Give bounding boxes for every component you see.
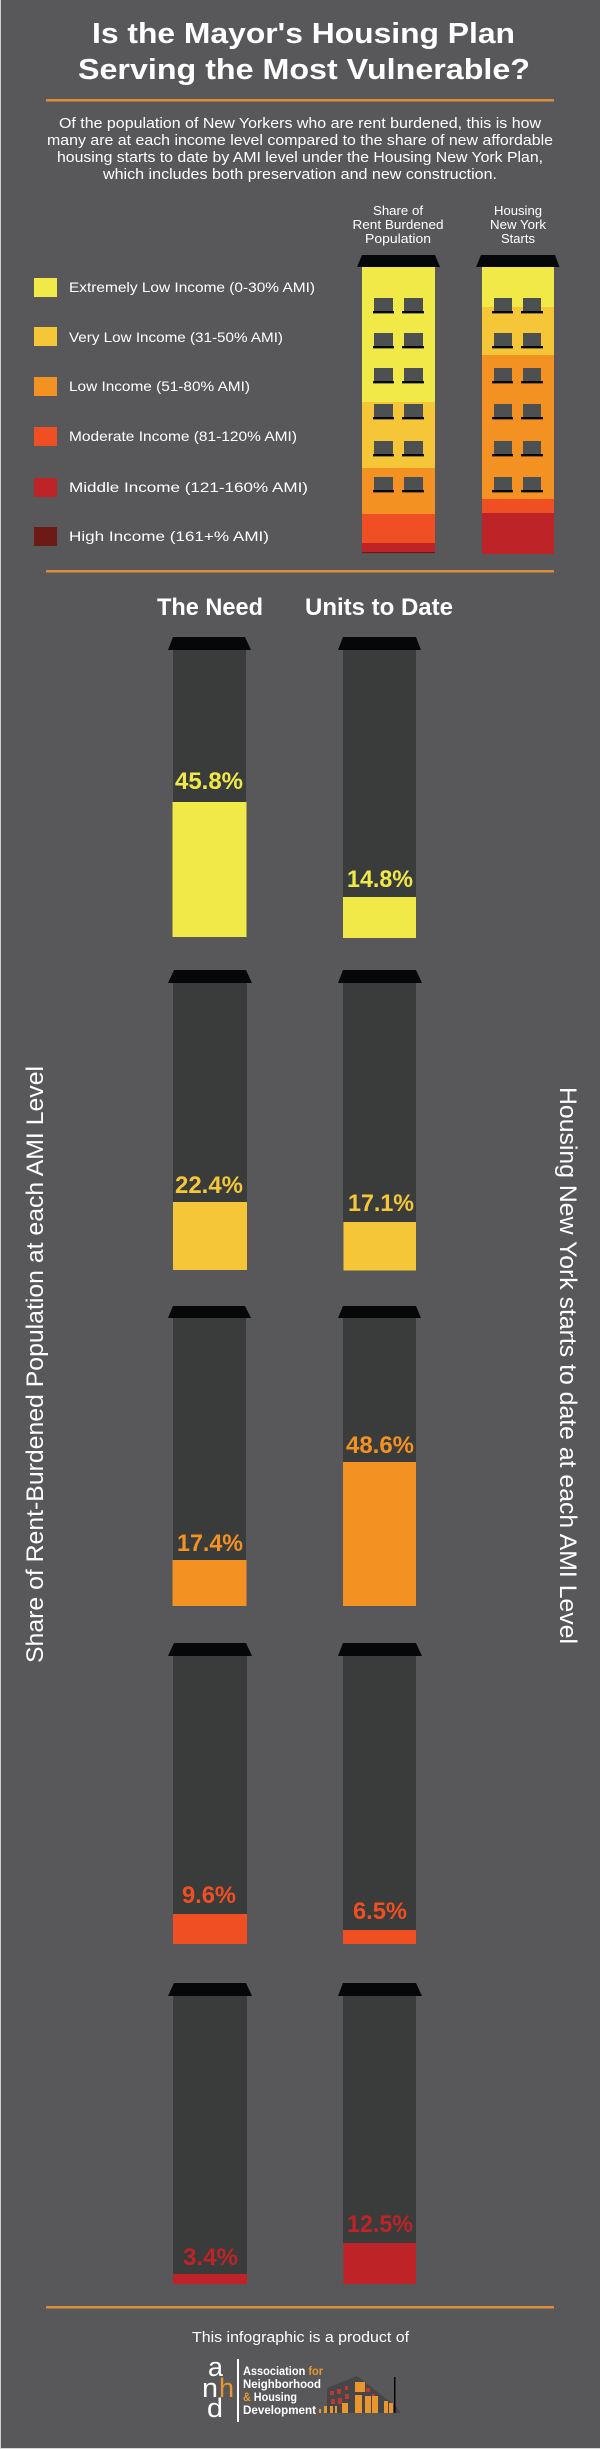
tower: need 45.8% (168, 637, 251, 937)
title (78, 18, 530, 86)
legend: very low income (34, 327, 283, 346)
logo organisation name: Development (243, 2403, 316, 2417)
legend: high income: High Income (161+% AMI) (69, 528, 269, 544)
tower: need 17.4% (168, 1306, 251, 1606)
logo organisation name: Association for (243, 2364, 323, 2378)
axis label: right: Housing New York starts to date at each AMI Level (554, 1087, 581, 1644)
title: Serving the Most Vulnerable? (78, 54, 530, 86)
heading: units to date: Units to Date (305, 594, 453, 621)
legend: middle income: Middle Income (121-160% AMI) (69, 479, 308, 495)
intro text: many are at each income level compared to the share of new affordable (47, 133, 553, 149)
legend: moderate income (34, 427, 297, 446)
legend: moderate income: Moderate Income (81-120% AMI) (69, 428, 297, 444)
logo letters (202, 2352, 234, 2423)
building chart: share of rent burdened population (357, 255, 440, 553)
logo letters: n (202, 2373, 218, 2403)
legend (34, 278, 315, 546)
logo organisation name: Neighborhood (243, 2377, 321, 2391)
building heading: housing new york starts (490, 204, 547, 246)
legend: extremely low income (34, 278, 315, 297)
logo: anhd (202, 2352, 400, 2423)
tower: units 48.6%: 48.6% (346, 1432, 414, 1459)
heading: the need: The Need (157, 594, 263, 621)
legend: very low income: Very Low Income (31-50% AMI) (69, 329, 283, 345)
tower: units 12.5%: 12.5% (347, 2211, 413, 2238)
tower: need 9.6% (168, 1643, 252, 1944)
building heading: share of rent burdened population: Population (365, 232, 431, 246)
axis label: left: Share of Rent-Burdened Population at each AMI Level (22, 1066, 49, 1663)
logo letters: a (208, 2352, 224, 2382)
tower: units 48.6% (338, 1306, 421, 1606)
tower: units 14.8%: 14.8% (347, 866, 413, 893)
intro text: housing starts to date by AMI level under the Housing New York Plan, (57, 150, 543, 166)
logo letters: h (219, 2373, 234, 2403)
legend: middle income (34, 478, 308, 497)
logo building illustration (319, 2376, 400, 2413)
tower: units 17.1%: 17.1% (348, 1190, 414, 1217)
tower: need 3.4%: 3.4% (183, 2244, 238, 2271)
tower: units 6.5%: 6.5% (353, 1898, 407, 1925)
building heading: housing new york starts: Starts (501, 232, 535, 246)
building heading: share of rent burdened population: Rent Burdened (352, 218, 444, 232)
logo letters: d (207, 2393, 223, 2423)
building heading: housing new york starts: Housing (494, 204, 542, 218)
tower: need 22.4%: 22.4% (175, 1172, 243, 1199)
building heading: housing new york starts: New York (490, 218, 547, 232)
tower: need 9.6%: 9.6% (182, 1882, 236, 1909)
tower: need 17.4%: 17.4% (177, 1530, 243, 1557)
tower: need 3.4% (168, 1983, 252, 2284)
legend: extremely low income: Extremely Low Income (0-30% AMI) (69, 279, 315, 295)
intro text (47, 116, 553, 183)
intro text: which includes both preservation and new construction. (102, 167, 497, 183)
building chart: housing new york starts (476, 255, 560, 554)
legend: high income (34, 527, 269, 546)
tower: units 17.1% (338, 970, 422, 1270)
logo organisation name: & Housing (243, 2390, 297, 2404)
building heading: share of rent burdened population (352, 204, 444, 246)
title: Is the Mayor's Housing Plan (92, 18, 515, 50)
logo organisation name (243, 2364, 323, 2417)
tower: units 14.8% (338, 637, 421, 938)
legend: low income: Low Income (51-80% AMI) (69, 378, 250, 394)
intro text: Of the population of New Yorkers who are rent burdened, this is how (59, 116, 542, 132)
tower: units 12.5% (338, 1983, 422, 2284)
tower: units 6.5% (338, 1643, 422, 1944)
tower: need 45.8%: 45.8% (175, 768, 243, 795)
building heading: share of rent burdened population: Share of (373, 204, 424, 218)
legend: low income (34, 377, 250, 396)
footer credit: This infographic is a product of (192, 2329, 410, 2346)
tower: need 22.4% (168, 970, 252, 1270)
